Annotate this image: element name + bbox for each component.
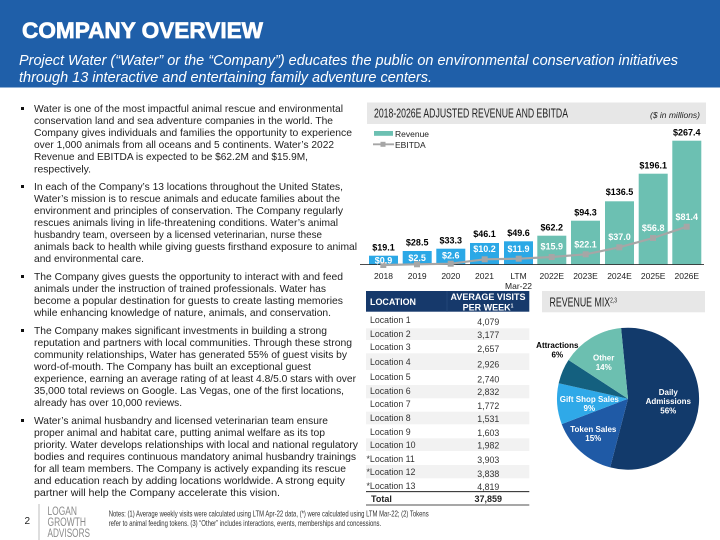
- bullet 5: proper animal and habitat care, putting animal welfare as its top: [34, 428, 325, 439]
- chart heading: [367, 102, 706, 124]
- axis labels: 2023E: [573, 271, 598, 281]
- panel: revenue and EBITDA chart: [360, 102, 706, 291]
- bullet 1: over 1,000 animals from all oceans and 5 continents. Water’s 2022: [34, 140, 334, 151]
- page number: 2: [24, 516, 30, 527]
- table location names: Location 4: [370, 357, 411, 367]
- table values: 3,177: [477, 330, 499, 340]
- chart heading: 2018-2026E ADJUSTED REVENUE AND EBITDA: [374, 106, 568, 120]
- bullet 5: and education reach by adding locations worldwide. A strong equity: [34, 476, 346, 487]
- pie labels: Token Sales: [570, 425, 617, 434]
- pie labels: 9%: [584, 404, 595, 413]
- axis labels: LTM: [510, 271, 527, 281]
- bullet 4: reputation and partners with local communities. Through these strong: [34, 338, 352, 349]
- revenue labels: $46.1: [473, 229, 496, 239]
- bullet 5: bodies and requires continuous mandatory animal husbandry trainings: [34, 452, 356, 463]
- bullet 2: [21, 182, 357, 265]
- subtitle: [19, 53, 678, 86]
- bullet 3: [21, 272, 343, 319]
- bullet 4: experience, earning an average rating of at least 4.8/5.0 stars with over: [34, 374, 357, 385]
- bullet text column: [21, 104, 359, 499]
- table location names: [366, 315, 416, 491]
- EBITDA line: [380, 224, 690, 268]
- table location names: Location 9: [370, 427, 411, 437]
- pie labels: 14%: [596, 363, 612, 372]
- table location names: *Location 12: [366, 467, 416, 477]
- subtitle: through 13 interactive and entertaining family adventure centers.: [19, 70, 432, 86]
- table values: 2,740: [477, 374, 499, 384]
- header banner: [0, 0, 720, 88]
- EBITDA labels: $37.0: [608, 232, 631, 242]
- chart heading: ($ in millions): [650, 110, 700, 120]
- bullet 3: become a popular destination for guests to create lasting memories: [34, 296, 343, 307]
- footer: [24, 504, 429, 540]
- table header: PER WEEK: [463, 302, 511, 312]
- table stripes: [366, 328, 529, 478]
- pie labels: Admissions: [646, 397, 692, 406]
- table values: 4,079: [477, 317, 499, 327]
- logo wordmark: [48, 506, 90, 540]
- EBITDA labels: $56.8: [642, 223, 664, 233]
- bullet 2: environment and principles of conservation. The Company regularly: [34, 206, 344, 217]
- pie labels: Other: [593, 354, 614, 362]
- axis labels: 2024E: [607, 271, 632, 281]
- bullet 5: priority. Water develops relationships with local and national regulatory: [34, 440, 359, 451]
- bullet 2: rescues animals living in life-threatening conditions. Water’s animal: [34, 218, 338, 229]
- EBITDA labels: $81.4: [676, 212, 698, 222]
- bullet 3: animals under the instruction of trained professionals. Water has: [34, 284, 326, 295]
- table values: 1,531: [477, 414, 499, 424]
- bullet 5: [21, 416, 359, 499]
- bullet 1: [21, 104, 352, 176]
- bullet 1: Company gives individuals and families the opportunity to experience: [34, 128, 352, 139]
- revenue mix heading: [542, 291, 705, 312]
- footnotes: refer to animal feeding tokens. (3) “Other” includes interactions, events, memberships and concessions.: [109, 518, 381, 528]
- table location names: Location 1: [370, 315, 411, 325]
- pie labels: 15%: [585, 434, 601, 443]
- revenue mix heading: REVENUE MIX: [550, 296, 636, 310]
- bullet 4: already has over 10,000 reviews.: [34, 398, 182, 409]
- table total row: Total: [371, 494, 392, 504]
- footnotes: [109, 508, 429, 528]
- bullet 5: for all team members. The Company is actively expanding its rescue: [34, 464, 346, 475]
- table values: 3,903: [477, 455, 499, 465]
- table location names: Location 5: [370, 372, 411, 382]
- revenue labels: $62.2: [541, 222, 563, 232]
- table location names: Location 10: [370, 440, 416, 450]
- bullet 2: animals back to health while giving guests firsthand exposure to animal: [34, 242, 357, 253]
- revenue mix heading: 2,3: [610, 298, 617, 304]
- axis labels: 2019: [408, 271, 427, 281]
- bullet 4: 35,000 total reviews on Google. Las Vegas, one of the first locations,: [34, 386, 344, 397]
- bullet 5: partner will help the Company accelerate this vision.: [34, 488, 280, 499]
- EBITDA labels: [375, 212, 698, 266]
- axis labels: 2021: [475, 271, 494, 281]
- EBITDA labels: $10.2: [473, 244, 496, 254]
- subtitle: Project Water (“Water” or the “Company”) educates the public on environmental conservation initiatives: [19, 53, 678, 69]
- table values: 3,838: [477, 469, 499, 479]
- revenue labels: $94.3: [574, 208, 597, 218]
- table location names: Location 2: [370, 329, 411, 339]
- revenue labels: $196.1: [639, 160, 667, 170]
- table total row: [366, 492, 529, 505]
- logo wordmark: ADVISORS: [48, 528, 90, 540]
- pie chart: [557, 328, 699, 470]
- bullet 5: Water’s animal husbandry and licensed veterinarian team ensure: [34, 416, 328, 427]
- pie labels: 56%: [660, 406, 676, 415]
- bullet 3: while enhancing knowledge of nature, animals, and conservation.: [33, 308, 331, 319]
- pie labels: [536, 341, 692, 443]
- bullet 1: Water is one of the most impactful animal rescue and environmental: [34, 104, 343, 115]
- table values: 4,819: [477, 482, 499, 492]
- bullet 2: husbandry team, overseen by a licensed veterinarian, nurse these: [34, 230, 322, 241]
- bullet 1: respectively.: [34, 164, 91, 176]
- table location names: *Location 11: [366, 454, 415, 464]
- axis labels: 2026E: [675, 271, 699, 281]
- EBITDA labels: $0.9: [375, 256, 392, 266]
- table header: LOCATION: [370, 297, 416, 307]
- table values: 2,657: [477, 344, 499, 354]
- footnotes: Notes: (1) Average weekly visits were calculated using LTM Apr-22 data, (*) were calculated using LTM Mar-22; (2) Tokens: [109, 508, 429, 518]
- logo wordmark: LOGAN: [48, 506, 77, 518]
- table values: 1,772: [477, 401, 499, 411]
- axis labels: 2025E: [641, 271, 666, 281]
- bullet 4: The Company makes significant investments in building a strong: [34, 326, 327, 337]
- table location names: Location 3: [370, 342, 411, 352]
- axis labels: 2018: [374, 271, 393, 281]
- panel: location table: [366, 291, 529, 505]
- table header: [366, 291, 529, 312]
- revenue labels: $136.5: [606, 187, 633, 197]
- EBITDA labels: $22.1: [574, 239, 597, 249]
- legend: EBITDA: [395, 140, 426, 150]
- legend: [373, 129, 429, 150]
- bullet 2: Water’s mission is to rescue animals and educate families about the: [34, 194, 340, 205]
- bullet 2: and environmental care.: [34, 254, 144, 265]
- table location names: Location 6: [370, 386, 411, 396]
- axis labels: 2020: [441, 271, 461, 281]
- table values: [477, 317, 499, 492]
- revenue labels: $267.4: [673, 128, 701, 138]
- revenue labels: $49.6: [507, 228, 530, 238]
- revenue labels: $28.5: [406, 238, 428, 248]
- table location names: Location 8: [370, 413, 411, 423]
- table location names: Location 7: [370, 399, 411, 409]
- table values: 2,926: [477, 360, 499, 370]
- axis labels: 2022E: [540, 271, 564, 281]
- bullet 1: conservation land and sea adventure companies in the world. The: [34, 116, 333, 127]
- bullet 2: In each of the Company’s 13 locations throughout the United States,: [34, 182, 343, 193]
- panel: revenue mix: [536, 291, 705, 470]
- bullet 4: word-of-mouth. The Company has built an exceptional guest: [33, 362, 311, 373]
- table location names: *Location 13: [366, 481, 416, 491]
- table header: 1: [511, 304, 514, 310]
- axis labels: Mar-22: [505, 281, 532, 291]
- table header: AVERAGE VISITS: [450, 292, 526, 302]
- pie labels: Gift Shop Sales: [560, 395, 619, 404]
- bullet 4: [21, 326, 357, 409]
- bullet 4: community relationships, Water has generated 55% of guest visits by: [34, 350, 348, 361]
- table values: 2,832: [477, 387, 499, 397]
- title: COMPANY OVERVIEW: [22, 18, 263, 43]
- revenue labels: $33.3: [440, 236, 462, 246]
- logo wordmark: GROWTH: [48, 517, 86, 529]
- EBITDA labels: $2.5: [408, 253, 426, 263]
- bullet 1: Revenue and EBITDA is expected to be $62.2M and $15.9M,: [34, 152, 308, 163]
- pie labels: 6%: [552, 350, 563, 359]
- axis labels: [374, 271, 699, 291]
- revenue bars: [369, 141, 701, 264]
- EBITDA labels: $15.9: [541, 242, 563, 252]
- legend: Revenue: [395, 129, 429, 139]
- table total row: 37,859: [475, 494, 502, 504]
- pie labels: Attractions: [536, 341, 579, 350]
- EBITDA labels: $2.6: [442, 251, 460, 261]
- EBITDA labels: $11.9: [507, 244, 530, 254]
- table values: 1,982: [477, 440, 499, 450]
- pie labels: Daily: [659, 388, 678, 397]
- revenue labels: [372, 128, 701, 252]
- table values: 1,603: [477, 428, 499, 438]
- revenue labels: $19.1: [372, 242, 395, 252]
- bullet 3: The Company gives guests the opportunity to interact with and feed: [34, 272, 343, 283]
